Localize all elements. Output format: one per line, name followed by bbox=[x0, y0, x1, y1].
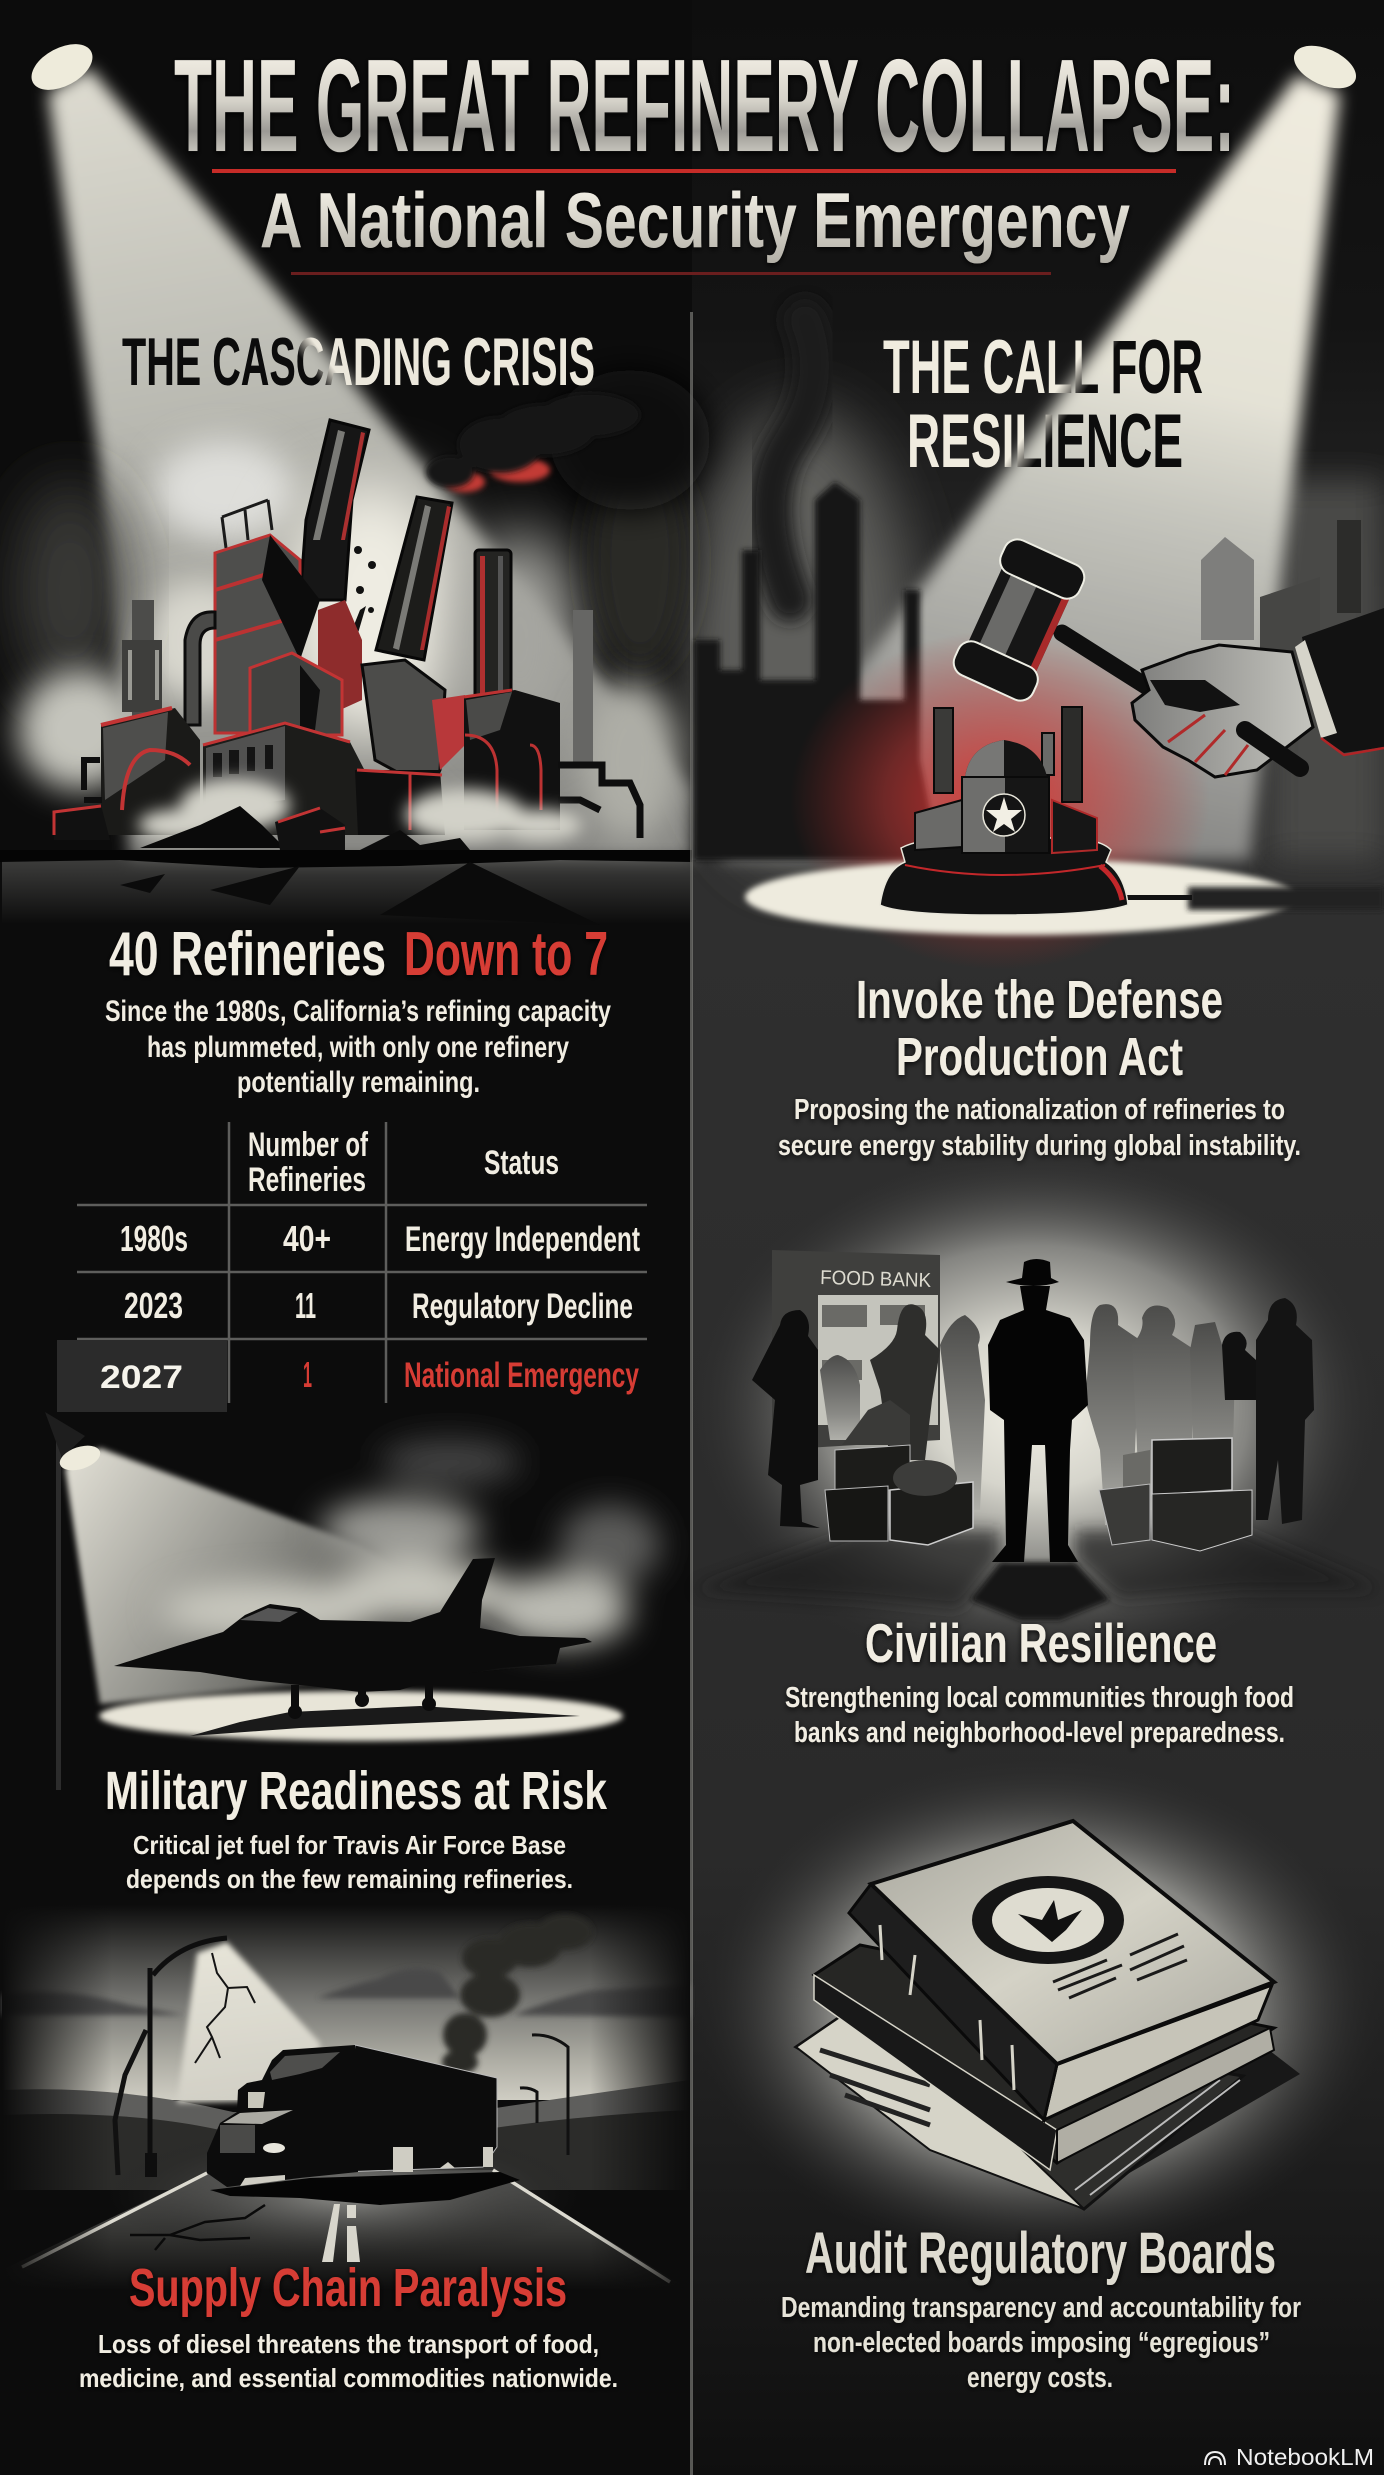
glow bbox=[690, 1145, 1380, 1675]
man shadow bbox=[970, 1562, 1110, 1620]
crate stack left bbox=[825, 1400, 973, 1545]
sky bbox=[2, 1905, 690, 2100]
miniature factory bbox=[915, 707, 1097, 853]
watermark: notebooklm: NotebookLM bbox=[1236, 2444, 1374, 2470]
illustration: fighter jet under lamp bbox=[45, 1412, 660, 1790]
table header bbox=[248, 1126, 559, 1199]
red glow bbox=[790, 630, 1210, 970]
sign text: FOOD BANK bbox=[820, 1267, 932, 1292]
civilian resilience text: Civilian Resilience bbox=[865, 1612, 1217, 1674]
lamp bbox=[45, 1412, 103, 1475]
red rule lower bbox=[291, 272, 1051, 275]
jet bbox=[114, 1558, 592, 1719]
row 1980s: 40+ bbox=[283, 1218, 331, 1259]
spotlight floor bbox=[745, 859, 1295, 935]
heading bbox=[883, 325, 1203, 484]
body text: Since the 1980s, California’s refining capacity bbox=[105, 995, 611, 1028]
row 1980s bbox=[120, 1218, 640, 1259]
base shadow bbox=[1120, 887, 1384, 910]
heading: THE CASCADING CRISIS bbox=[122, 324, 595, 400]
central man bbox=[988, 1259, 1088, 1562]
body text: potentially remaining. bbox=[237, 1066, 480, 1099]
body text bbox=[105, 995, 611, 1099]
jet canopy bbox=[240, 1608, 298, 1622]
chimney 1 bbox=[300, 420, 369, 600]
illustration: collapsing refinery bbox=[54, 420, 640, 841]
cast shadow bbox=[1070, 2047, 1300, 2190]
headline: 40 refineries: 40 Refineries bbox=[109, 920, 386, 989]
chimney 2 bbox=[376, 497, 452, 660]
pipes right bbox=[558, 765, 640, 838]
gavel bbox=[949, 535, 1160, 705]
row 2027: 2027 bbox=[100, 1359, 183, 1395]
truck bbox=[207, 2045, 520, 2205]
hand bbox=[1132, 608, 1384, 777]
foreground steam bbox=[138, 779, 582, 841]
illustration: civilian resilience bbox=[690, 1145, 1380, 1675]
lamp beam bbox=[65, 1448, 560, 1704]
black smoke bbox=[770, 320, 815, 600]
scene vignette bbox=[2, 1905, 690, 2290]
road cracks bbox=[130, 2205, 265, 2250]
spotlight beam: right bbox=[690, 75, 1384, 870]
audit regulatory boards text: non-elected boards imposing “egregious” bbox=[813, 2327, 1270, 2359]
papers bbox=[796, 2010, 1243, 2209]
panel: the cascading crisis bbox=[0, 324, 710, 2393]
row 1980s: Energy Independent bbox=[405, 1220, 640, 1259]
icon: star bbox=[983, 794, 1025, 836]
truck smoke bbox=[442, 1914, 593, 2074]
row 2023 bbox=[124, 1285, 633, 1326]
title line 2: A National Security Emergency bbox=[260, 176, 1130, 264]
debris bbox=[352, 546, 376, 640]
clouds bbox=[2, 1968, 690, 2017]
upper book bbox=[849, 1821, 1274, 2120]
row 2023: 11 bbox=[295, 1285, 316, 1326]
panel: the call for resilience bbox=[690, 320, 1384, 2394]
tower bbox=[185, 500, 320, 733]
far lamps bbox=[520, 2035, 568, 2155]
lower book bbox=[814, 1945, 1274, 2170]
lower building bbox=[203, 723, 445, 835]
red wedge right bbox=[432, 695, 470, 770]
background refinery silhouette bbox=[694, 482, 1361, 860]
supply chain text: Loss of diesel threatens the transport of food, bbox=[98, 2329, 599, 2359]
cover bbox=[871, 1821, 1274, 2064]
handle bbox=[1062, 633, 1160, 695]
illustration: regulatory books bbox=[695, 1755, 1384, 2265]
headline: 40 refineries: Down to 7 bbox=[404, 920, 608, 989]
food bank bbox=[772, 1250, 940, 1450]
crate stack right bbox=[1099, 1438, 1252, 1551]
body text: has plummeted, with only one refinery bbox=[147, 1031, 569, 1064]
table header: Status bbox=[484, 1144, 559, 1182]
row 2027 bbox=[57, 1340, 639, 1412]
panel divider bbox=[690, 312, 693, 2475]
military readiness text: Military Readiness at Risk bbox=[105, 1761, 608, 1821]
lit floor bbox=[99, 1691, 623, 1741]
supply chain text: Supply Chain Paralysis bbox=[129, 2258, 567, 2318]
row 2023: 2023 bbox=[124, 1285, 183, 1326]
table header: Number of bbox=[248, 1126, 368, 1164]
left wing bbox=[54, 708, 200, 840]
icon: notebooklm mark bbox=[1205, 2452, 1225, 2465]
hills bbox=[2, 2080, 690, 2190]
chimney 3 bbox=[475, 550, 511, 700]
man right silhouette bbox=[1256, 1298, 1314, 1524]
defense production act text: Invoke the Defense bbox=[856, 970, 1223, 1030]
red rule upper bbox=[212, 169, 1176, 173]
smoke behind the refinery bbox=[15, 370, 710, 840]
floor shadow bbox=[694, 1530, 1380, 1610]
supply chain text: medicine, and essential commodities nationwide. bbox=[79, 2363, 618, 2393]
spine bbox=[849, 1884, 1057, 2120]
military readiness text bbox=[105, 1761, 608, 1894]
glow bbox=[695, 1755, 1384, 2265]
audit regulatory boards text: energy costs. bbox=[967, 2362, 1113, 2394]
rubble and ground bbox=[0, 806, 692, 925]
table: refinery decline bbox=[57, 1122, 647, 1412]
row 1980s: 1980s bbox=[120, 1218, 188, 1259]
spotlight beam: left bbox=[48, 68, 692, 860]
child silhouette bbox=[1222, 1332, 1256, 1400]
lamp post bbox=[56, 1440, 61, 1790]
military readiness text: Critical jet fuel for Travis Air Force Base bbox=[133, 1830, 566, 1860]
crowd: faded figures bbox=[820, 1304, 1235, 1525]
black smoke plume bbox=[426, 393, 640, 492]
row 2027: National Emergency bbox=[404, 1356, 639, 1395]
street lamp bbox=[115, 1938, 227, 2177]
supply chain text bbox=[79, 2258, 618, 2393]
right block bbox=[464, 690, 560, 830]
defense production act text bbox=[778, 970, 1301, 1162]
person with clipboard bbox=[870, 1304, 940, 1460]
spotlight lamp: left bbox=[24, 35, 100, 99]
illustration: stalled truck bbox=[2, 1905, 690, 2290]
background chimneys bbox=[122, 600, 593, 765]
jet shadow bbox=[190, 1706, 580, 1736]
table header: Refineries bbox=[248, 1161, 366, 1199]
heading: RESILIENCE bbox=[907, 399, 1183, 484]
spotlight lamp: right bbox=[1288, 37, 1362, 97]
smoke bbox=[160, 1440, 660, 1646]
button base bbox=[880, 838, 1128, 915]
seal bbox=[972, 1876, 1124, 1964]
head bbox=[949, 535, 1089, 705]
collapsed wedge bbox=[362, 660, 445, 790]
cover lines bbox=[1053, 1934, 1187, 1998]
crack bbox=[195, 1953, 255, 2063]
road bbox=[2, 2170, 690, 2290]
row 2023: Regulatory Decline bbox=[412, 1287, 633, 1326]
woman silhouette bbox=[752, 1310, 820, 1528]
title bbox=[174, 32, 1235, 275]
central block bbox=[250, 653, 342, 735]
lamp beam bbox=[177, 1942, 320, 2103]
military readiness text: depends on the few remaining refineries. bbox=[126, 1864, 573, 1894]
defense production act text: Production Act bbox=[896, 1027, 1183, 1087]
red wedge bbox=[318, 600, 362, 710]
civilian resilience text bbox=[785, 1612, 1294, 1749]
row 2027: 1 bbox=[303, 1354, 312, 1395]
pages bbox=[1044, 1985, 1272, 2120]
audit regulatory boards text bbox=[781, 2221, 1301, 2394]
